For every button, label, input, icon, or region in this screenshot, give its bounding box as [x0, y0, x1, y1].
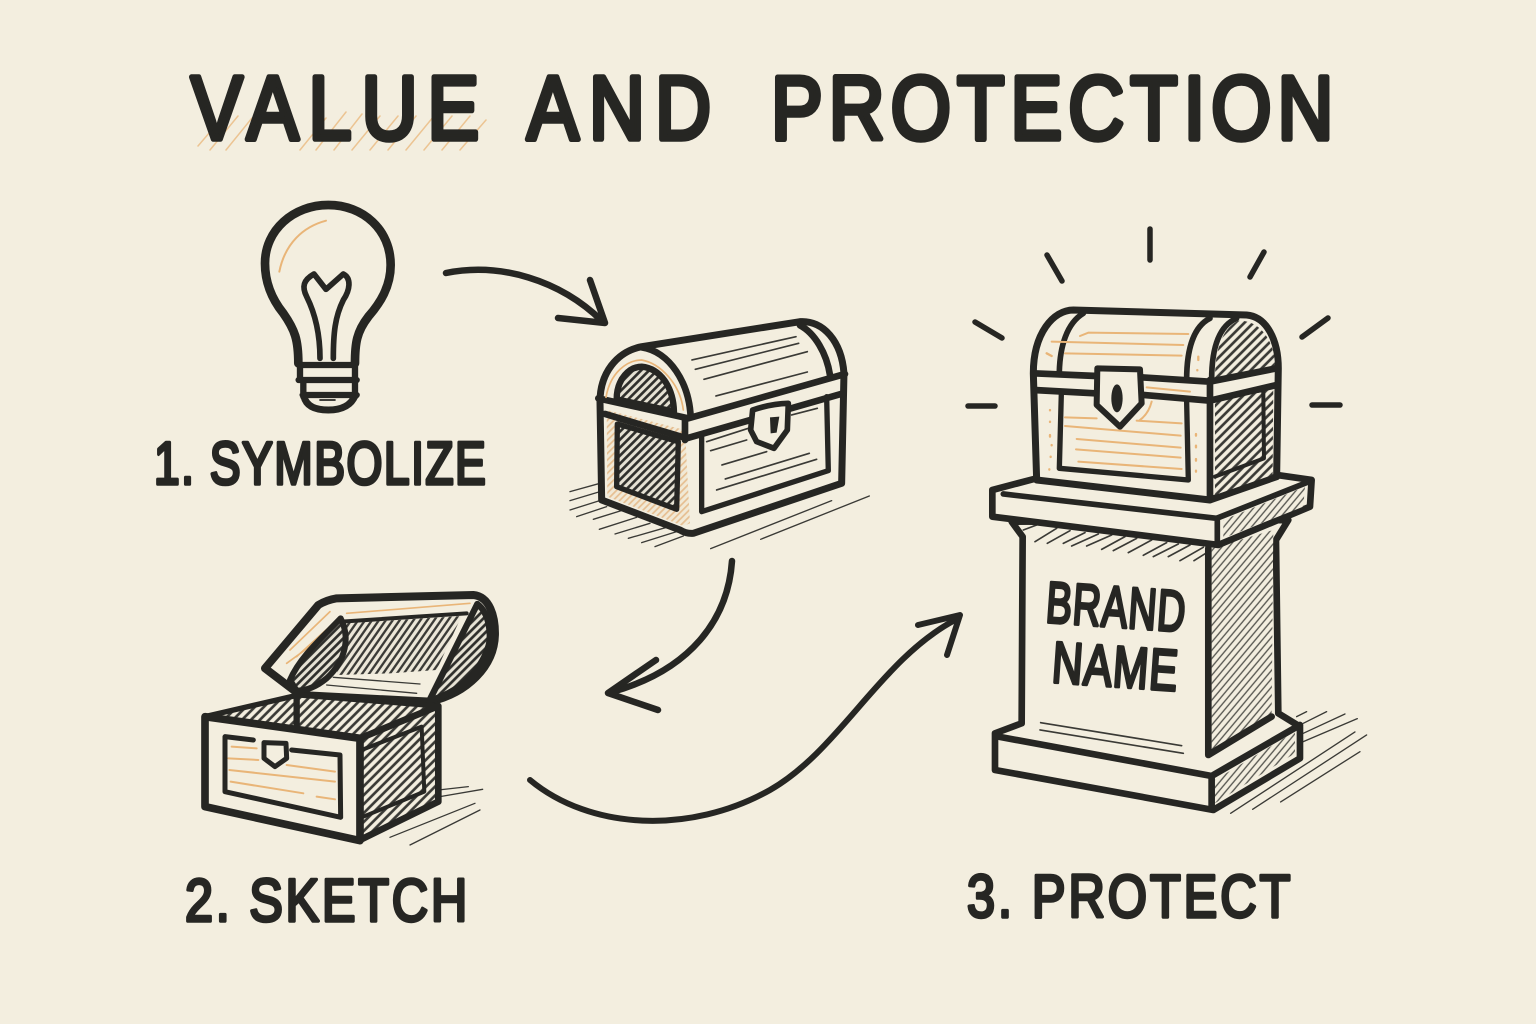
box right side	[360, 706, 438, 840]
lock	[751, 403, 788, 448]
lid edges and bands	[642, 325, 830, 417]
under-slab hatching	[1023, 525, 1208, 561]
leaf end	[290, 618, 346, 691]
side panel shading	[617, 424, 678, 509]
front panel	[1059, 394, 1188, 480]
lock	[264, 743, 287, 767]
front wood lines	[228, 747, 335, 799]
title: VALUE	[191, 58, 479, 158]
dome shading	[1215, 321, 1275, 380]
label: step 1 symbolize: 1. SYMBOLIZE	[154, 431, 486, 497]
base side hatching	[1215, 732, 1295, 803]
column and base outline	[995, 520, 1300, 810]
arrow: open chest to protected chest	[530, 615, 960, 821]
band fill right	[1217, 373, 1273, 395]
icon: light bulb	[265, 205, 391, 410]
orange wood lines	[1052, 333, 1190, 469]
title	[191, 58, 1333, 158]
wood lines	[692, 337, 817, 490]
title: AND	[527, 58, 711, 158]
ground shadow lines	[390, 787, 483, 845]
column side hatching	[1212, 530, 1273, 750]
icon: closed treasure chest	[570, 322, 869, 549]
ground shadow lines	[570, 483, 869, 549]
arch shading	[617, 367, 674, 412]
chest body	[1033, 310, 1278, 500]
rays: glow around chest	[968, 229, 1340, 406]
pedestal text: brand name: BRAND	[1044, 570, 1188, 645]
box front	[205, 717, 360, 841]
side panel	[1215, 390, 1264, 477]
bands	[1033, 368, 1277, 500]
arrow: closed chest to open chest	[608, 561, 732, 710]
pedestal	[995, 520, 1367, 813]
side shading	[1215, 387, 1273, 495]
ground shadow lines	[1231, 712, 1367, 813]
lid	[265, 595, 495, 702]
pedestal top slab	[992, 475, 1312, 545]
front panel	[702, 397, 828, 512]
inner vertical post	[287, 693, 306, 725]
box interior	[205, 695, 438, 738]
label: step 2 sketch: 2. SKETCH	[185, 867, 467, 934]
chest body	[600, 322, 844, 533]
pedestal text: brand name	[1044, 570, 1188, 703]
title underlay: orange hatching	[198, 112, 486, 150]
label: step 3 protect: 3. PROTECT	[967, 863, 1290, 930]
plinth lines	[1040, 723, 1183, 753]
lid orange wood strokes	[287, 603, 470, 663]
title: PROTECTION	[771, 58, 1333, 158]
side face orange hatching	[607, 410, 690, 526]
lid curves	[1059, 313, 1237, 380]
icon: protected treasure chest	[1033, 310, 1278, 500]
column front edge	[998, 548, 1300, 809]
arrow: bulb to closed chest	[446, 270, 605, 323]
pedestal text: brand name: NAME	[1050, 630, 1180, 703]
lid inner edge	[342, 613, 467, 622]
lock	[1097, 368, 1142, 427]
lid end shading	[429, 604, 490, 701]
icon: open treasure chest	[205, 595, 495, 845]
orange rivets	[1047, 353, 1198, 472]
front panel	[225, 737, 341, 817]
lid interior shading	[337, 616, 462, 675]
